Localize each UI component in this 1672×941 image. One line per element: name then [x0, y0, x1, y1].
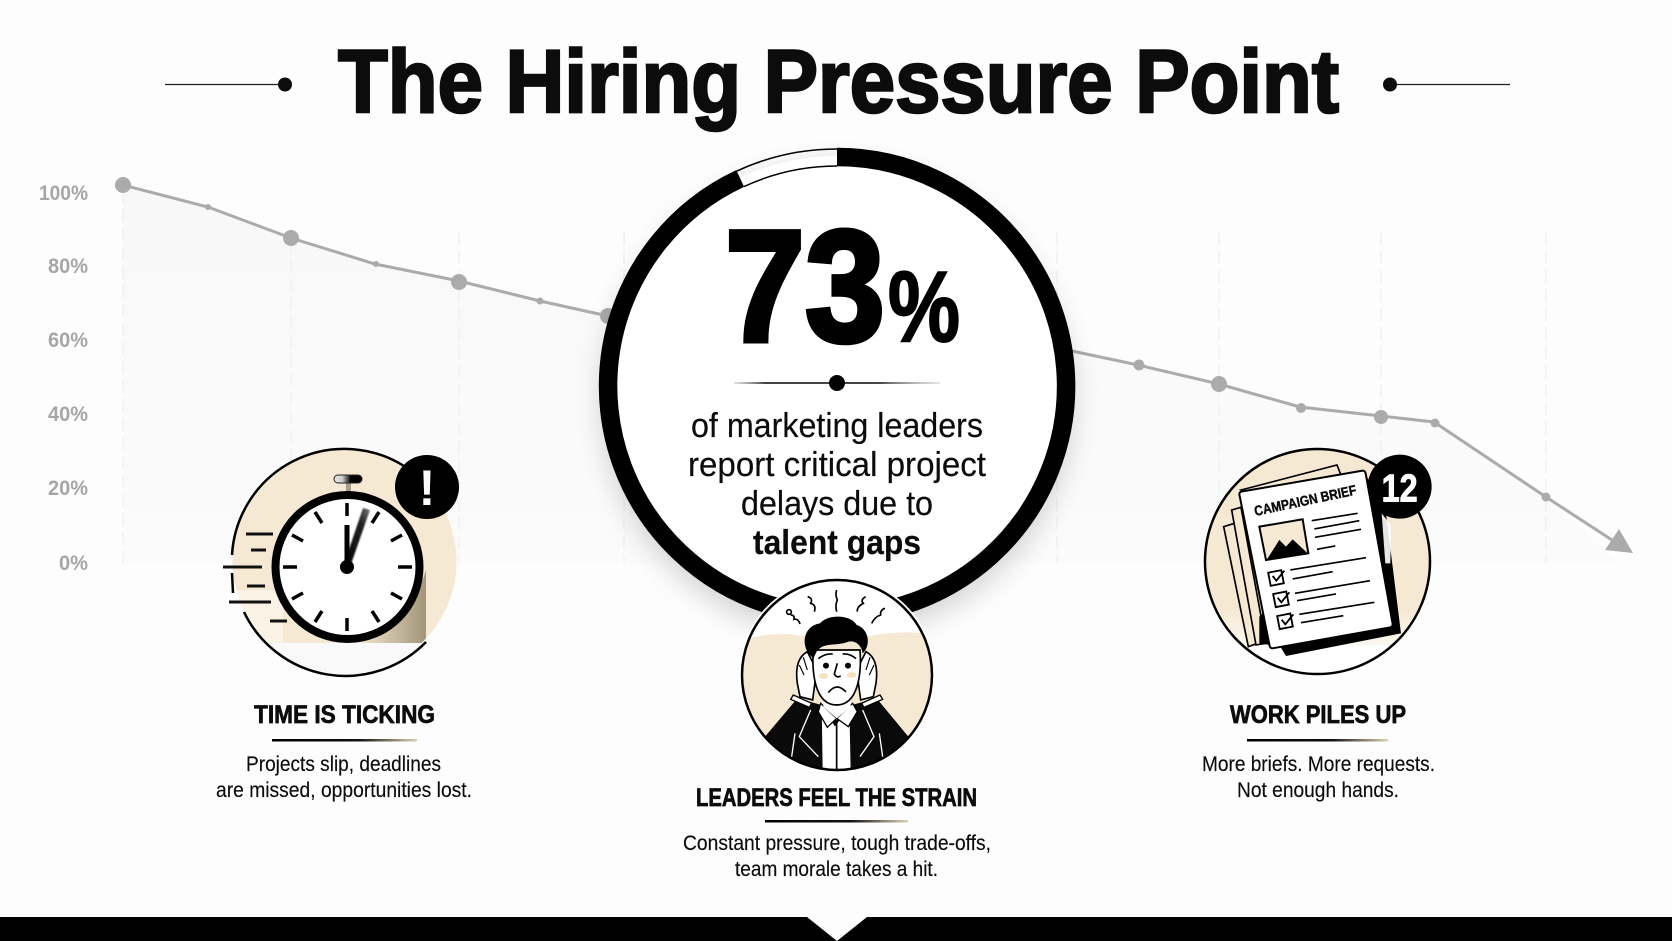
y axis labels: 60% [48, 329, 88, 352]
big number: 73 [725, 197, 885, 375]
page text lines [1290, 513, 1374, 623]
title ornament left [165, 78, 292, 92]
progress ring 73 percent [608, 157, 1066, 615]
cuffs [791, 695, 883, 707]
work piles up caption: WORK PILES UP [1230, 701, 1406, 729]
jacket [766, 702, 908, 768]
y axis labels: 20% [48, 477, 88, 500]
time is ticking caption: Projects slip, deadlines [246, 753, 441, 776]
stat description: talent gaps [753, 524, 921, 562]
central stat circle [601, 149, 1073, 636]
stopwatch crown [334, 475, 362, 493]
speed lines [223, 534, 287, 621]
time is ticking caption [216, 701, 472, 802]
hair [805, 617, 868, 658]
back pages [1224, 523, 1258, 647]
stress squiggles [787, 590, 885, 624]
y axis labels [39, 182, 88, 575]
declining line chart [39, 177, 1633, 575]
hands [797, 652, 817, 700]
arrow head [1605, 529, 1633, 553]
leaders feel the strain caption: team morale takes a hit. [735, 858, 938, 881]
page heading: CAMPAIGN BRIEF [1253, 482, 1358, 519]
stopwatch ticks [283, 503, 412, 631]
alert badge [395, 455, 459, 519]
alert badge: ! [419, 460, 435, 516]
count badge: 12 [1382, 466, 1418, 510]
stat divider [734, 375, 940, 391]
footer bar with notch [0, 917, 1672, 941]
percent sign: % [888, 251, 960, 363]
neck [823, 700, 851, 718]
stat description: of marketing leaders [691, 407, 983, 445]
image placeholder [1259, 519, 1308, 560]
stat description: report critical project [688, 446, 987, 484]
stopwatch hands [340, 508, 370, 574]
leaders feel the strain caption [683, 784, 991, 881]
icon: stopwatch [223, 440, 465, 683]
title ornament right [1383, 78, 1510, 92]
work piles up caption [1202, 701, 1435, 802]
trend line [123, 185, 1612, 540]
face [813, 650, 860, 705]
y axis labels: 80% [48, 255, 88, 278]
icon: stressed leader [739, 577, 935, 783]
time is ticking caption: TIME IS TICKING [254, 701, 435, 729]
stat description [688, 407, 987, 562]
main page [1239, 471, 1393, 648]
time is ticking caption: are missed, opportunities lost. [216, 779, 472, 802]
stat description: delays due to [741, 485, 933, 523]
leaders feel the strain caption: Constant pressure, tough trade-offs, [683, 832, 991, 855]
data points [115, 177, 1550, 502]
page shadow [1259, 475, 1401, 656]
work piles up caption: More briefs. More requests. [1202, 753, 1435, 776]
title: The Hiring Pressure Point [338, 31, 1339, 131]
facial features [823, 663, 829, 669]
chart area fill [123, 185, 1619, 563]
y axis labels: 100% [39, 182, 88, 205]
y axis labels: 40% [48, 403, 88, 426]
leaders feel the strain caption: LEADERS FEEL THE STRAIN [696, 784, 977, 812]
icon: campaign brief pile [1200, 445, 1436, 674]
y axis labels: 0% [59, 552, 88, 575]
count badge [1368, 455, 1432, 519]
work piles up caption: Not enough hands. [1237, 779, 1399, 802]
checkboxes [1268, 570, 1293, 629]
shirt and collar [822, 718, 851, 769]
stopwatch face [276, 495, 420, 639]
